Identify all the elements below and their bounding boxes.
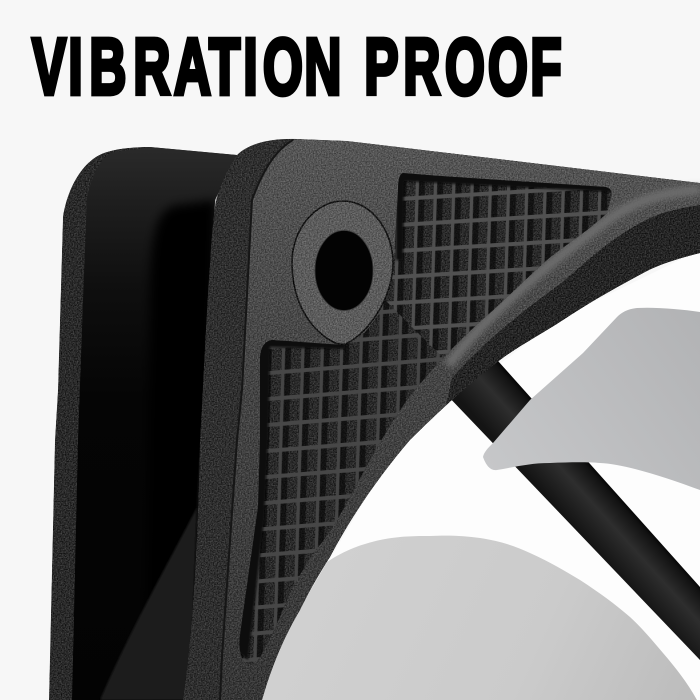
- front fan frame: [183, 139, 700, 700]
- fan blade: lower: [255, 536, 697, 700]
- frame side band: [183, 139, 700, 700]
- inner dark chamfer: [446, 205, 700, 405]
- fan blade: upper: [483, 308, 700, 490]
- chamfer highlight: [448, 190, 700, 365]
- washer: [292, 201, 393, 344]
- fan opening: white interior: [255, 250, 700, 700]
- screw hole: [315, 230, 373, 310]
- frame front face: [220, 139, 700, 700]
- crease line: [220, 140, 293, 700]
- textured mesh pad: [239, 173, 612, 664]
- rear fan frame: [49, 147, 237, 700]
- mounting washer and screw hole: [292, 201, 393, 344]
- title: VIBRATION PROOF: [32, 23, 562, 112]
- fan spoke: [445, 352, 700, 660]
